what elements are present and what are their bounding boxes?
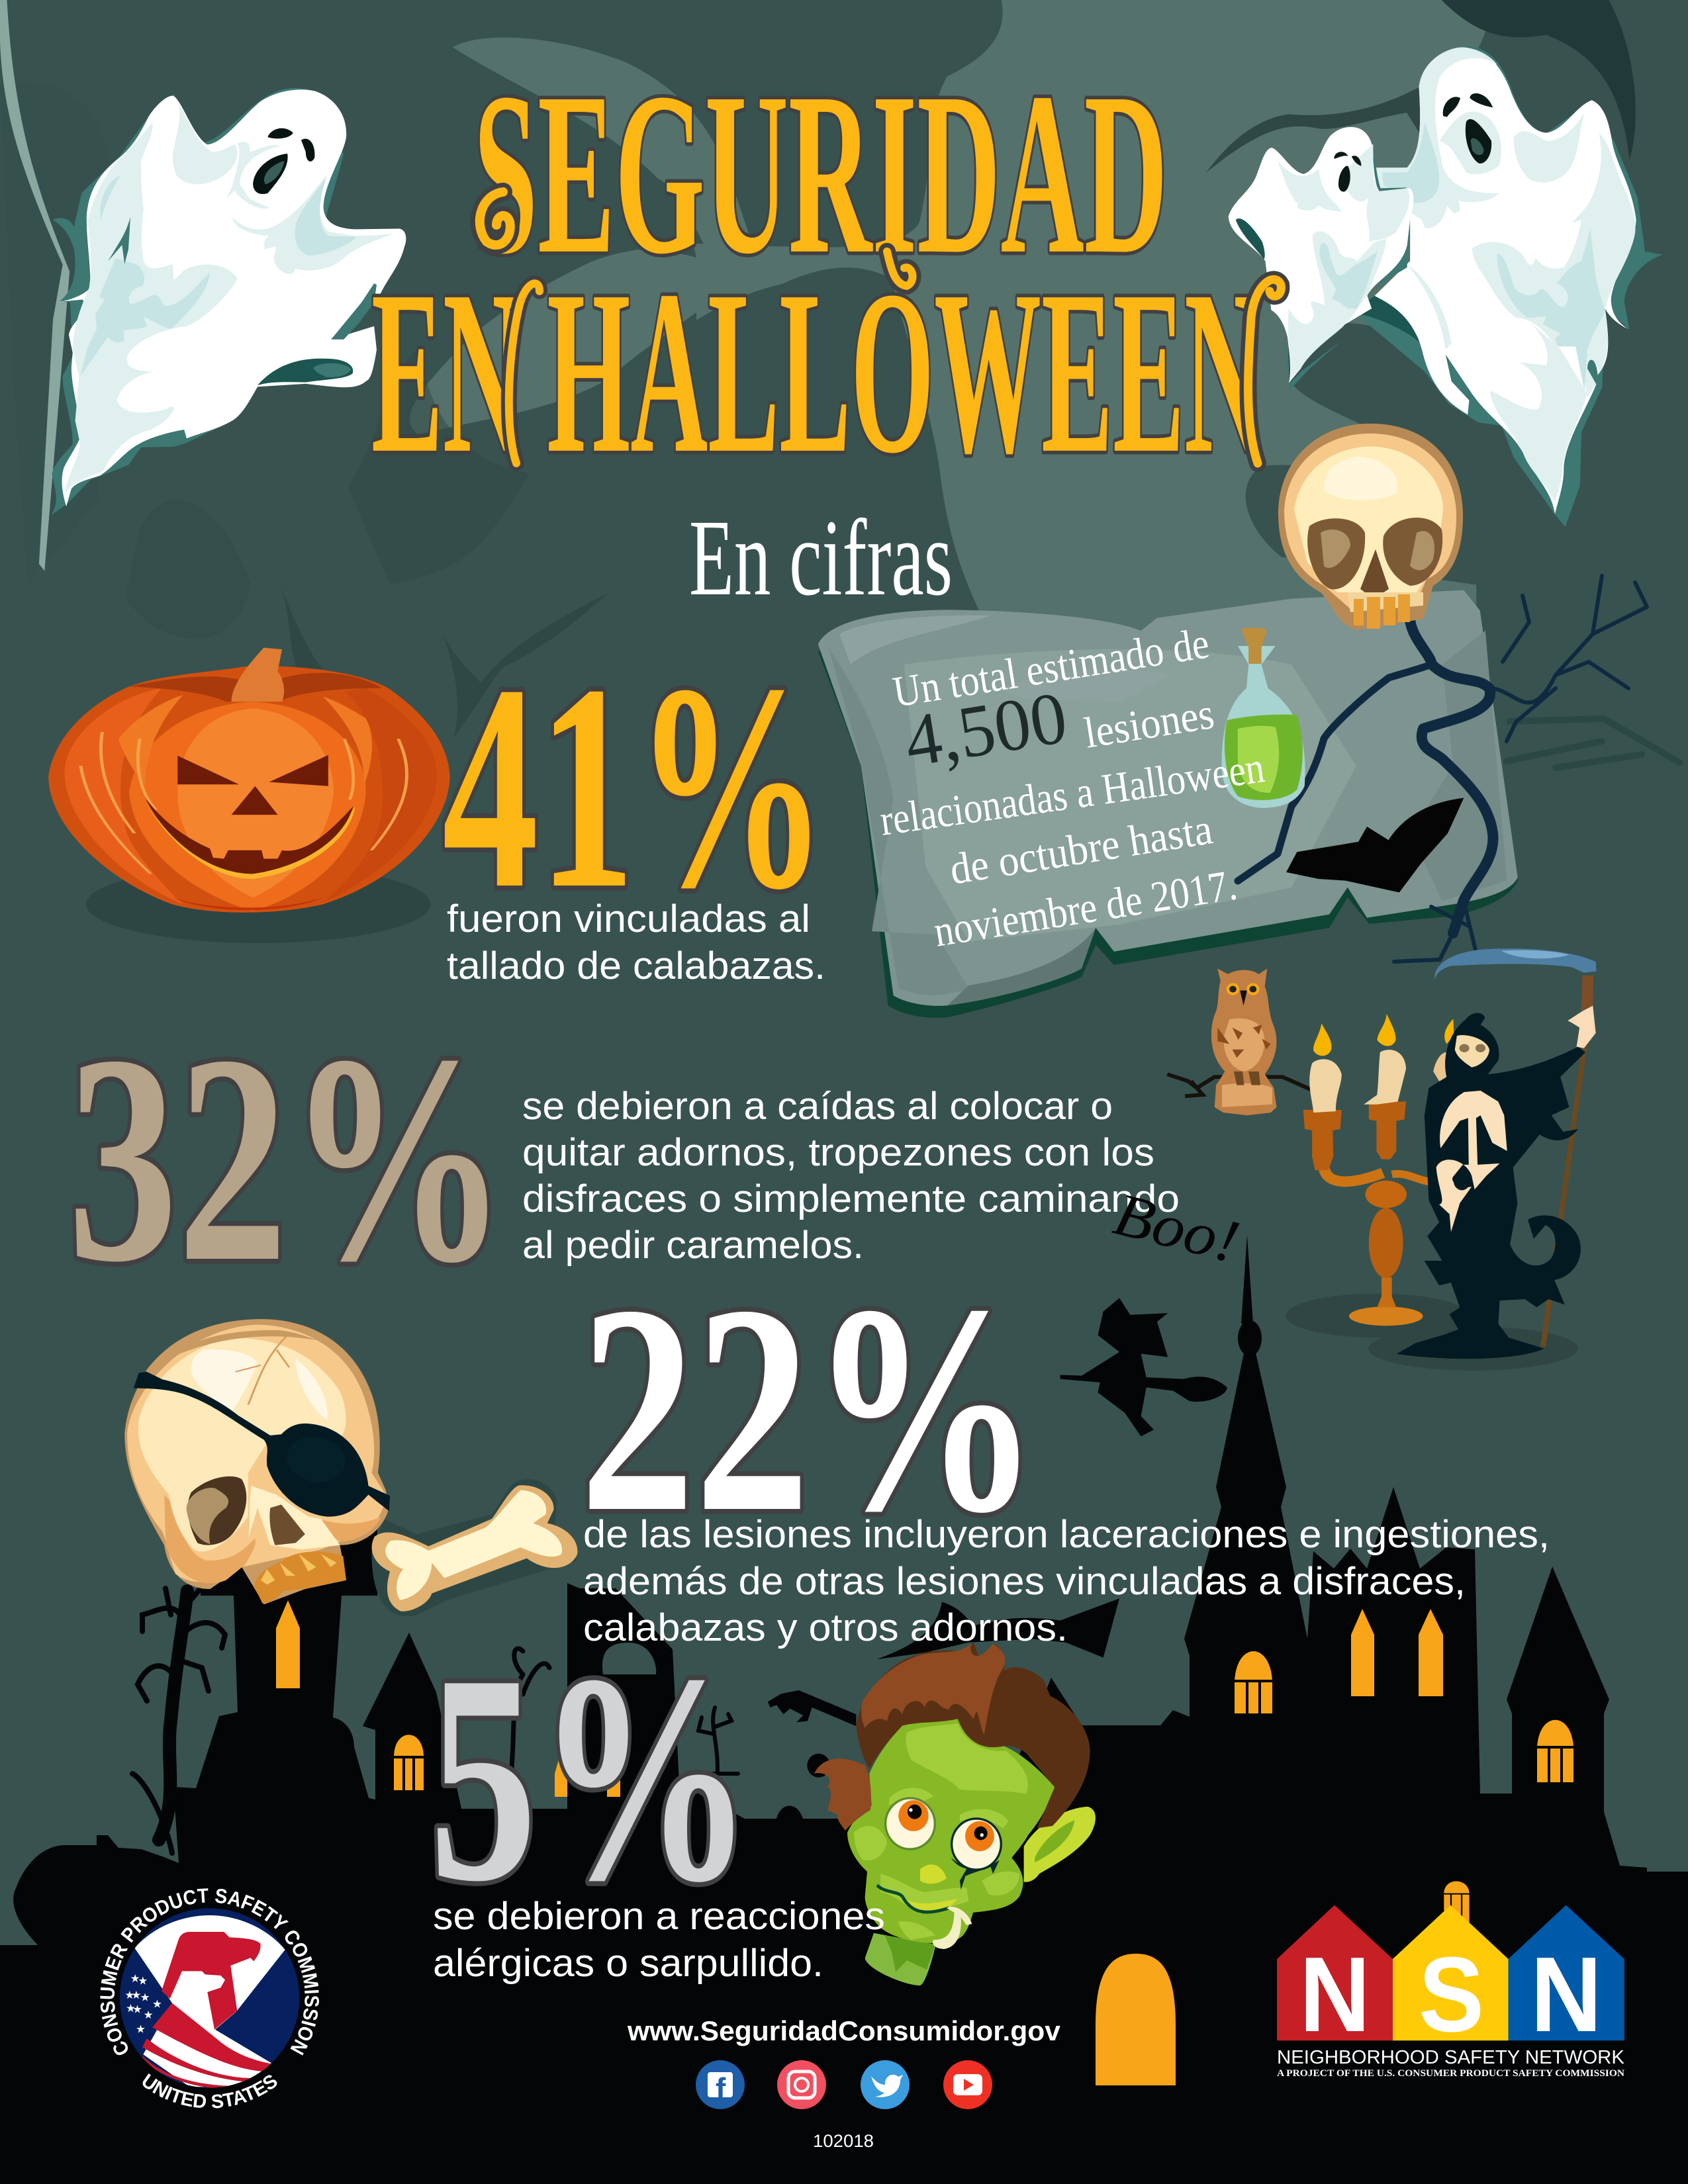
subheading: En cifras: En cifras bbox=[689, 497, 953, 618]
NSN logo: N bbox=[1299, 1935, 1370, 2054]
CPSC seal logo: ★ bbox=[126, 2002, 136, 2015]
tablet panel bbox=[818, 590, 1518, 1018]
CPSC seal logo: ★ bbox=[152, 1997, 162, 2010]
reaper bbox=[1396, 948, 1597, 1359]
stat 41%: tallado de calabazas. bbox=[447, 944, 825, 987]
dead tree on tablet bbox=[1238, 576, 1679, 962]
CPSC seal logo: ★ bbox=[138, 1974, 148, 1987]
stat 32%: quitar adornos, tropezones con los bbox=[522, 1131, 1154, 1174]
stat 32% bbox=[68, 994, 1180, 1324]
website URL: www.SeguridadConsumidor.gov bbox=[627, 2015, 1061, 2046]
stat 22%: 22% bbox=[580, 1244, 1040, 1574]
doorway bbox=[1096, 1954, 1176, 2085]
tablet text: Un total estimado de bbox=[890, 619, 1212, 717]
social icons bbox=[696, 2060, 992, 2109]
stat 22%: de las lesiones incluyeron laceraciones e ingestiones, bbox=[583, 1513, 1550, 1556]
owl bbox=[1167, 969, 1313, 1115]
stat 41%: fueron vinculadas al bbox=[447, 897, 810, 940]
CPSC seal logo: ★ bbox=[130, 1972, 140, 1985]
stat 22%: calabazas y otros adornos. bbox=[583, 1606, 1068, 1649]
tablet text: relacionadas a Halloween bbox=[877, 743, 1267, 845]
CPSC seal logo: ★ bbox=[132, 2003, 142, 2016]
stat 32%: disfraces o simplemente caminando bbox=[522, 1177, 1180, 1220]
icon: instagram bbox=[777, 2060, 826, 2109]
Boo! lettering: Boo! bbox=[1107, 1179, 1246, 1275]
CPSC seal logo: ★ bbox=[136, 2023, 146, 2036]
icon: twitter bbox=[861, 2060, 910, 2109]
ghost pair right bbox=[1229, 46, 1663, 527]
tablet text bbox=[877, 619, 1267, 956]
NSN logo: N bbox=[1530, 1935, 1602, 2054]
stat 5%: alérgicas o sarpullido. bbox=[433, 1942, 823, 1985]
tablet text: noviembre de 2017. bbox=[931, 860, 1241, 956]
pumpkin bbox=[48, 648, 450, 943]
bone bbox=[371, 1479, 577, 1616]
title swash flourishes bbox=[480, 192, 1281, 463]
lit castle windows bbox=[276, 1600, 1573, 1797]
NSN logo: NEIGHBORHOOD SAFETY NETWORK bbox=[1277, 2047, 1625, 2068]
NSN logo: S bbox=[1419, 1935, 1484, 2054]
skull with eye patch and bone bbox=[124, 1319, 577, 1616]
skull top right bbox=[1278, 424, 1463, 630]
CPSC seal logo: ★ bbox=[131, 1989, 141, 2001]
potion bottle bbox=[1222, 627, 1305, 808]
heading: Seguridad en Halloween bbox=[371, 44, 1281, 502]
witch silhouette bbox=[1060, 1298, 1227, 1436]
icon: facebook: f bbox=[716, 2071, 726, 2106]
CPSC seal logo: CONSUMER PRODUCT SAFETY COMMISSION bbox=[100, 1888, 319, 2056]
tablet text: de octubre hasta bbox=[947, 805, 1215, 894]
ghost left bbox=[51, 88, 406, 516]
CPSC seal logo: ★ bbox=[124, 1989, 134, 2001]
castle silhouette skyline bbox=[0, 1235, 1688, 2184]
CPSC seal logo: ★ bbox=[144, 2009, 154, 2021]
icon: youtube bbox=[943, 2060, 992, 2109]
CPSC seal logo: ★ bbox=[140, 1991, 150, 2003]
bat on tablet bbox=[1286, 798, 1464, 892]
NSN logo: A PROJECT OF THE U.S. CONSUMER PRODUCT SAFETY COMMISSION bbox=[1277, 2068, 1624, 2079]
stat 32%: al pedir caramelos. bbox=[522, 1224, 864, 1267]
icon: facebook bbox=[696, 2060, 745, 2109]
stat 32%: 32% bbox=[68, 994, 508, 1324]
tablet text: lesiones bbox=[1081, 690, 1217, 758]
stat 41% bbox=[442, 624, 827, 987]
zombie arm silhouette bbox=[768, 1690, 856, 1726]
stat 22%: además de otras lesiones vinculadas a disfraces, bbox=[583, 1560, 1466, 1603]
stat 41%: 41% bbox=[442, 624, 827, 950]
stat 5%: 5% bbox=[429, 1614, 753, 1943]
owl candelabra and reaper bbox=[1167, 948, 1597, 1371]
tablet text: 4,500 bbox=[900, 676, 1072, 783]
print code: 102018 bbox=[813, 2131, 874, 2151]
dead trees bbox=[132, 1575, 738, 1853]
CPSC seal logo: UNITED STATES bbox=[143, 2073, 277, 2109]
bat silhouette bbox=[877, 1598, 1119, 1659]
stat 22% bbox=[580, 1244, 1550, 1649]
candelabra bbox=[1303, 1014, 1454, 1326]
stat 5%: se debieron a reacciones bbox=[433, 1895, 885, 1938]
zombie head bbox=[807, 1641, 1096, 1985]
NSN logo bbox=[1277, 1881, 1625, 2079]
stat 32%: se debieron a caídas al colocar o bbox=[522, 1085, 1113, 1128]
